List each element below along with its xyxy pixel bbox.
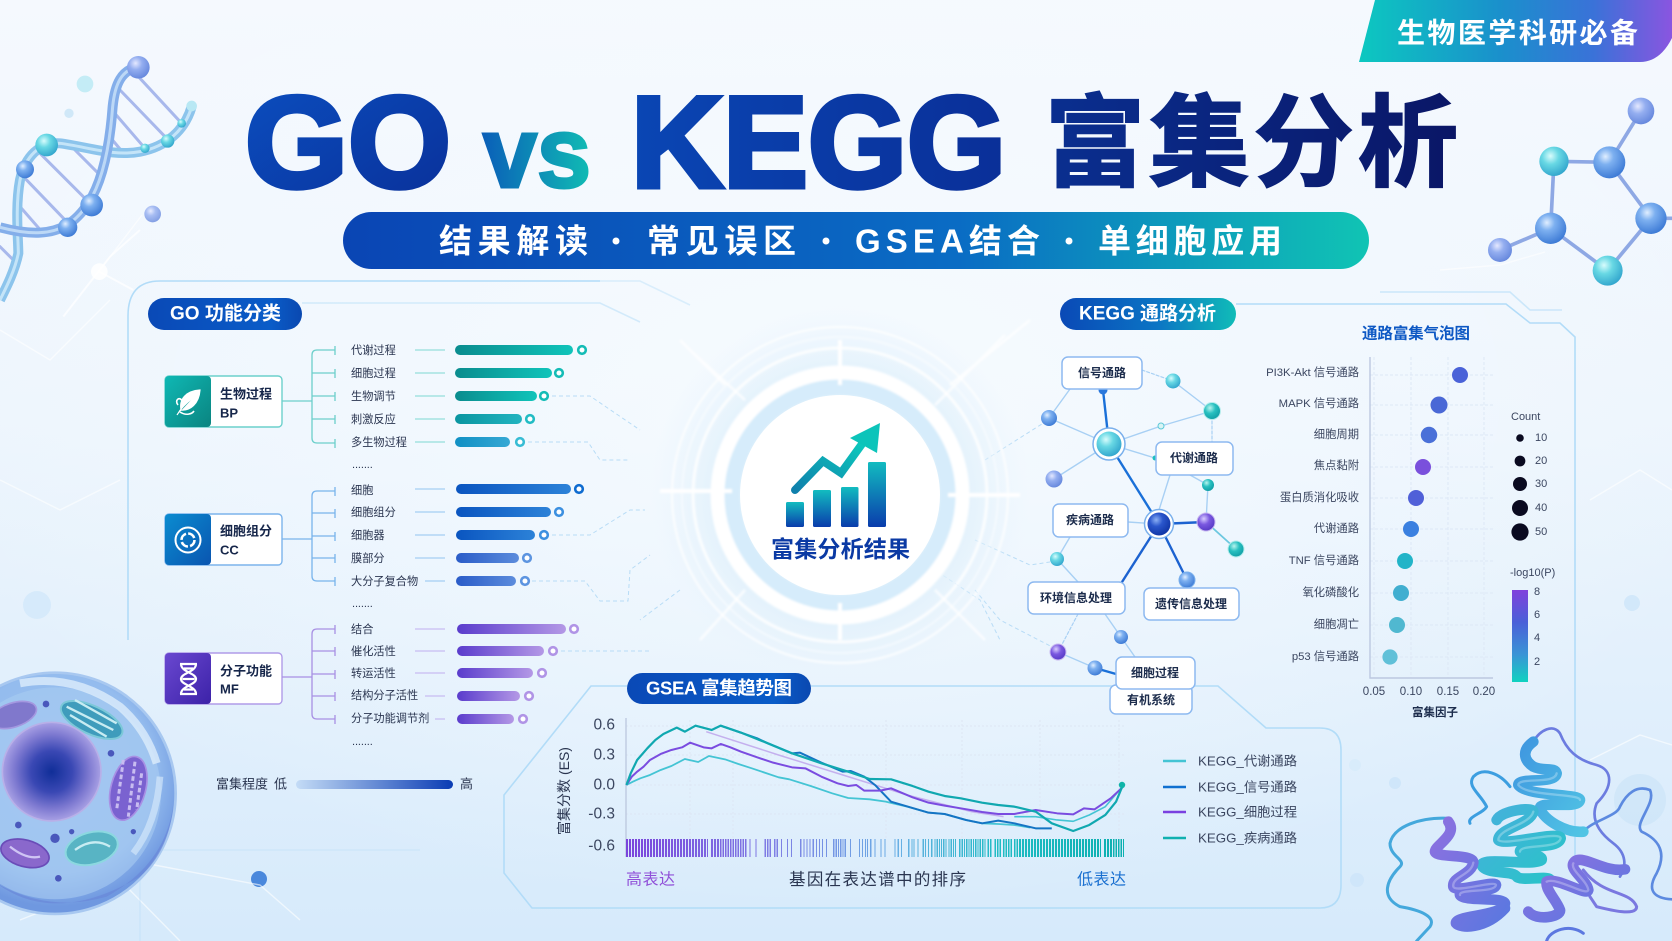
colour scale legend: 2 [1534, 656, 1540, 668]
group: molecular function [165, 622, 578, 748]
title: vs [483, 97, 591, 209]
enrichment level legend: 富集程度 [216, 776, 268, 792]
count legend: 10 [1535, 432, 1547, 444]
row: 刺激反应 [351, 412, 534, 426]
row: 生物调节 [351, 389, 548, 403]
network edges [1049, 370, 1236, 674]
colour scale legend [1510, 567, 1555, 682]
bubble rows: p53 信号通路 [1292, 649, 1359, 663]
colour scale legend: 6 [1534, 609, 1540, 621]
row: 细胞器: 细胞器 [351, 529, 385, 542]
panel: KEGG pathway analysis [1028, 298, 1555, 719]
group: cellular component [165, 484, 583, 610]
count legend: Count [1511, 411, 1540, 423]
curve legend [1163, 754, 1297, 846]
y axis ticks: 0.3 [593, 746, 615, 764]
bubble rows: 焦点黏附 [1314, 458, 1359, 472]
node: 信号通路: 信号通路 [1078, 365, 1126, 380]
icon: molecule [1488, 98, 1672, 286]
row: 分子功能调节剂 [351, 711, 527, 725]
ellipsis: ....... [352, 459, 373, 471]
count legend: 50 [1535, 526, 1547, 538]
curve legend: KEGG_代谢通路 [1198, 754, 1297, 768]
curve legend: KEGG_疾病通路 [1198, 830, 1297, 846]
bubble rows: 代谢通路 [1314, 521, 1359, 535]
row: 细胞组分 [351, 505, 563, 519]
GSEA heading pill: GSEA 富集趋势图 [646, 678, 792, 698]
bubble rows [1266, 365, 1468, 665]
row: 生物调节: 生物调节 [351, 389, 396, 403]
node: 环境信息处理 [1028, 582, 1125, 614]
enrichment curves [626, 726, 1122, 831]
row: 细胞组分: 细胞组分 [351, 505, 396, 519]
row: 刺激反应: 刺激反应 [351, 412, 396, 426]
CC tree [282, 487, 335, 586]
y axis ticks [588, 716, 615, 854]
network nodes [1041, 374, 1244, 676]
top right banner: 生物医学科研必备 [1397, 18, 1638, 48]
count legend: 20 [1535, 455, 1547, 467]
row: 代谢过程 [351, 343, 586, 357]
title: 富集分析 [1045, 88, 1458, 200]
glow rings [660, 320, 1030, 663]
row: 结合: 结合 [351, 622, 373, 636]
title: GO [245, 69, 451, 215]
ellipsis: ....... [352, 736, 373, 748]
enrichment level legend: 低 [274, 776, 287, 792]
gene rank rug plot [626, 839, 1124, 857]
count legend: 30 [1535, 478, 1547, 490]
x axis labels: 0.10 [1400, 686, 1422, 698]
panel frames [128, 281, 1575, 908]
icon: rising bar chart with arrow [786, 423, 886, 527]
colour scale legend: -log10(P) [1510, 567, 1555, 579]
row: 大分子复合物: 大分子复合物 [351, 574, 418, 588]
node: 疾病通路: 疾病通路 [1066, 512, 1114, 527]
row: 细胞过程 [351, 367, 563, 380]
icon: protein ribbon [1387, 728, 1672, 941]
bubble rows: 蛋白质消化吸收 [1280, 490, 1359, 504]
bubble rows: TNF 信号通路 [1289, 553, 1359, 567]
network diagram [1028, 357, 1244, 714]
title [245, 69, 1458, 215]
CC card: CC [220, 542, 239, 558]
icon: DNA helix [0, 56, 197, 317]
MF tree [282, 625, 335, 724]
row: 大分子复合物 [351, 574, 529, 588]
bubble rows: 细胞周期 [1314, 427, 1359, 441]
row: 催化活性: 催化活性 [351, 644, 396, 658]
node: 疾病通路 [1053, 504, 1128, 537]
node: 遗传信息处理: 遗传信息处理 [1155, 596, 1227, 611]
GSEA heading pill [627, 673, 811, 704]
dashed flow connectors [528, 396, 1058, 651]
node: 细胞过程 [1116, 657, 1195, 689]
BP card [165, 376, 282, 427]
enrichment level legend [216, 776, 473, 792]
node: 有机系统 [1110, 685, 1192, 714]
group: biological process [165, 343, 586, 471]
panel: GSEA trend chart [556, 673, 1297, 889]
row: 细胞过程: 细胞过程 [351, 367, 396, 380]
y axis ticks: -0.3 [588, 806, 615, 822]
BP tree [282, 346, 335, 448]
row: 转运活性 [351, 666, 546, 680]
curve legend: KEGG_信号通路 [1198, 780, 1297, 794]
row: 细胞: 细胞 [351, 484, 373, 497]
row: 多生物过程 [351, 435, 524, 449]
bubble rows: 细胞凋亡 [1314, 617, 1359, 631]
node: 环境信息处理: 环境信息处理 [1040, 590, 1112, 605]
panel: center hub [650, 305, 1030, 685]
subtitle pill: 常见误区 [647, 222, 796, 260]
rank axis labels: 高表达 [626, 870, 675, 888]
y axis ticks: -0.6 [588, 838, 615, 854]
row: 结构分子活性: 结构分子活性 [351, 688, 418, 702]
x axis labels: 0.15 [1437, 686, 1459, 698]
row: 催化活性 [351, 644, 557, 658]
x axis labels [1363, 686, 1495, 719]
curve legend: KEGG_细胞过程 [1198, 804, 1297, 820]
row: 分子功能调节剂: 分子功能调节剂 [351, 711, 429, 725]
enrichment level legend: 高 [460, 776, 473, 792]
bubble rows: 氧化磷酸化 [1302, 585, 1359, 599]
bubble rows: MAPK 信号通路 [1279, 396, 1359, 410]
row: 转运活性: 转运活性 [351, 666, 396, 680]
node: 有机系统: 有机系统 [1127, 692, 1175, 707]
MF card [165, 653, 282, 704]
count legend: 40 [1535, 502, 1547, 514]
x axis labels: 0.20 [1473, 686, 1495, 698]
y axis title: 富集分数 (ES) [556, 747, 572, 835]
node: 代谢通路: 代谢通路 [1170, 450, 1218, 465]
rank axis labels [626, 870, 1126, 889]
bubble chart grid and axes [1370, 357, 1493, 678]
curve end dot [1119, 782, 1125, 788]
subtitle pill: 结果解读 [439, 222, 588, 260]
x axis labels: 0.05 [1363, 686, 1385, 698]
subtitle pill [343, 212, 1369, 269]
bubble rows: PI3K-Akt 信号通路 [1266, 365, 1359, 379]
icon: cell illustration [0, 673, 176, 914]
subtitle pill: GSEA结合 [855, 222, 1040, 260]
x axis labels: 富集因子 [1412, 705, 1458, 719]
node: 代谢通路 [1156, 442, 1233, 475]
row: 细胞 [351, 484, 583, 497]
KEGG heading pill: KEGG 通路分析 [1079, 302, 1216, 324]
BP card: 生物过程 [220, 386, 272, 402]
rank axis labels: 低表达 [1077, 870, 1126, 888]
row: 细胞器 [351, 529, 548, 542]
KEGG heading pill [1060, 298, 1236, 330]
y axis ticks: 0.6 [593, 716, 615, 734]
node: 细胞过程: 细胞过程 [1131, 665, 1179, 680]
bubble chart [1266, 324, 1555, 719]
y axis ticks: 0.0 [593, 776, 615, 794]
bubble chart title: 通路富集气泡图 [1362, 324, 1470, 342]
BP card: BP [220, 406, 238, 420]
title: KEGG [631, 69, 1006, 215]
row: 膜部分: 膜部分 [351, 551, 385, 565]
top right banner [1359, 0, 1672, 62]
node: 信号通路 [1062, 357, 1142, 389]
rank axis labels: 基因在表达谱中的排序 [789, 870, 966, 889]
count legend [1511, 411, 1547, 541]
MF card: MF [220, 682, 239, 696]
row: 结合 [351, 622, 578, 636]
CC card [165, 514, 282, 565]
grid and axis [626, 718, 1124, 857]
hub label: 富集分析结果 [771, 536, 910, 562]
node: 遗传信息处理 [1144, 588, 1239, 620]
row: 多生物过程: 多生物过程 [351, 435, 407, 449]
subtitle pill: 单细胞应用 [1098, 222, 1282, 260]
row: 代谢过程: 代谢过程 [351, 343, 396, 357]
row: 膜部分 [351, 551, 531, 565]
colour scale legend: 8 [1534, 586, 1540, 598]
panel: GO functional classification [148, 298, 586, 792]
GO heading pill [148, 298, 302, 330]
colour scale legend: 4 [1534, 632, 1540, 644]
GO heading pill: GO 功能分类 [170, 302, 281, 324]
row: 结构分子活性 [351, 688, 533, 702]
MF card: 分子功能 [220, 664, 272, 678]
ellipsis: ....... [352, 598, 373, 610]
CC card: 细胞组分 [220, 524, 272, 538]
